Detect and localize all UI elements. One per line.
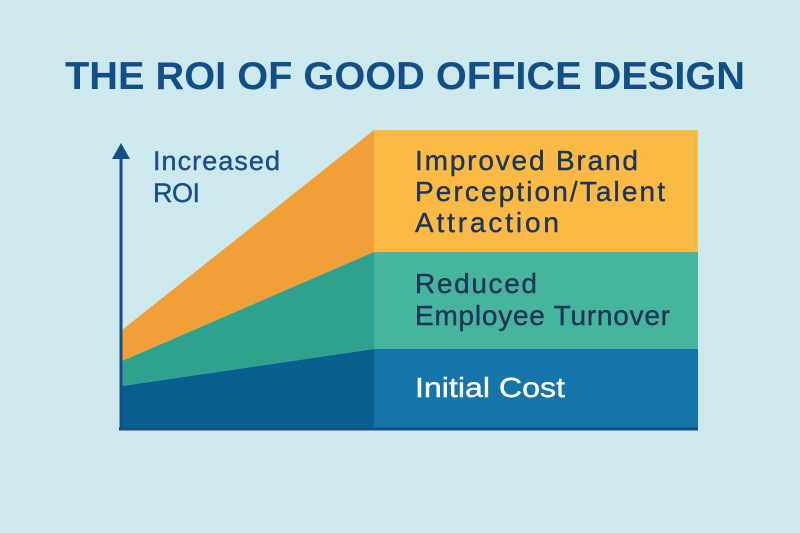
axis label: Increased	[153, 146, 280, 176]
right block: teal	[374, 252, 698, 349]
title: THE ROI OF GOOD OFFICE DESIGN	[65, 55, 745, 98]
left area: teal	[122, 252, 374, 386]
y axis arrow	[112, 143, 130, 430]
axis label: ROI	[153, 178, 200, 208]
left area: blue	[122, 349, 374, 428]
right block: blue	[374, 349, 698, 428]
label: brand perception: Perception/Talent	[415, 176, 665, 207]
label: brand perception: Improved Brand	[415, 145, 638, 176]
label: brand perception: Attraction	[415, 207, 559, 238]
label: turnover: Reduced	[415, 268, 537, 299]
x axis	[119, 428, 698, 430]
label: initial cost: Initial Cost	[415, 372, 565, 403]
right block: orange	[374, 130, 698, 252]
left area: orange	[122, 130, 374, 361]
label: turnover: Employee Turnover	[415, 300, 670, 331]
